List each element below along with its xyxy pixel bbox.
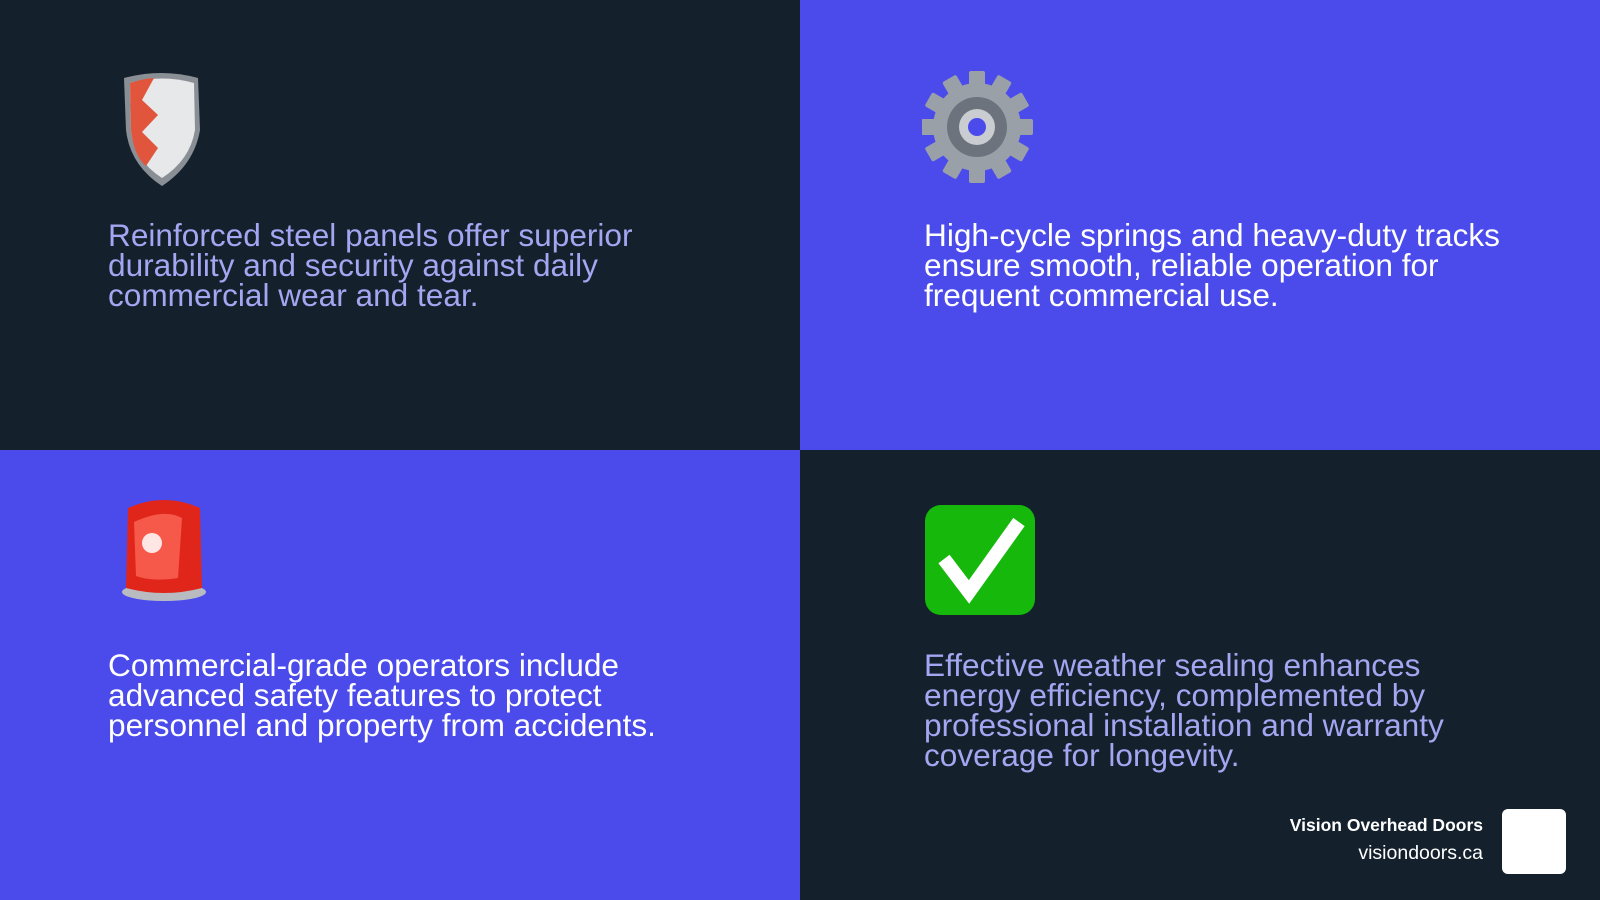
text: safety: advanced safety features to protect xyxy=(108,677,602,713)
text: safety: personnel and property from accidents. xyxy=(108,707,656,743)
icon: check xyxy=(925,505,1035,615)
text: operation: High-cycle springs and heavy-duty tracks xyxy=(924,217,1500,253)
icon: siren xyxy=(122,500,206,601)
text: operation xyxy=(924,217,1500,313)
text: durability: commercial wear and tear. xyxy=(108,277,479,313)
text: weather sealing: Effective weather sealing enhances xyxy=(924,647,1420,683)
icon: shield xyxy=(124,73,200,186)
panel: durability xyxy=(0,0,800,450)
footer: brand: visiondoors.ca xyxy=(1358,842,1483,864)
footer: brand: Vision Overhead Doors xyxy=(1290,815,1483,835)
panel: weather sealing xyxy=(800,450,1600,900)
logo box xyxy=(1502,809,1566,874)
text: safety: Commercial-grade operators include xyxy=(108,647,619,683)
text: weather sealing: energy efficiency, complemented by xyxy=(924,677,1425,713)
text: weather sealing xyxy=(924,647,1444,773)
footer: brand xyxy=(1290,815,1483,864)
panel: operation xyxy=(800,0,1600,450)
text: durability: durability and security against daily xyxy=(108,247,598,283)
text: operation: ensure smooth, reliable operation for xyxy=(924,247,1439,283)
text: weather sealing: coverage for longevity. xyxy=(924,737,1240,773)
text: weather sealing: professional installation and warranty xyxy=(924,707,1444,743)
text: safety xyxy=(108,647,656,743)
panel: safety xyxy=(0,450,800,900)
text: durability xyxy=(108,217,633,313)
icon: gear xyxy=(922,71,1033,183)
text: durability: Reinforced steel panels offer superior xyxy=(108,217,633,253)
text: operation: frequent commercial use. xyxy=(924,277,1279,313)
